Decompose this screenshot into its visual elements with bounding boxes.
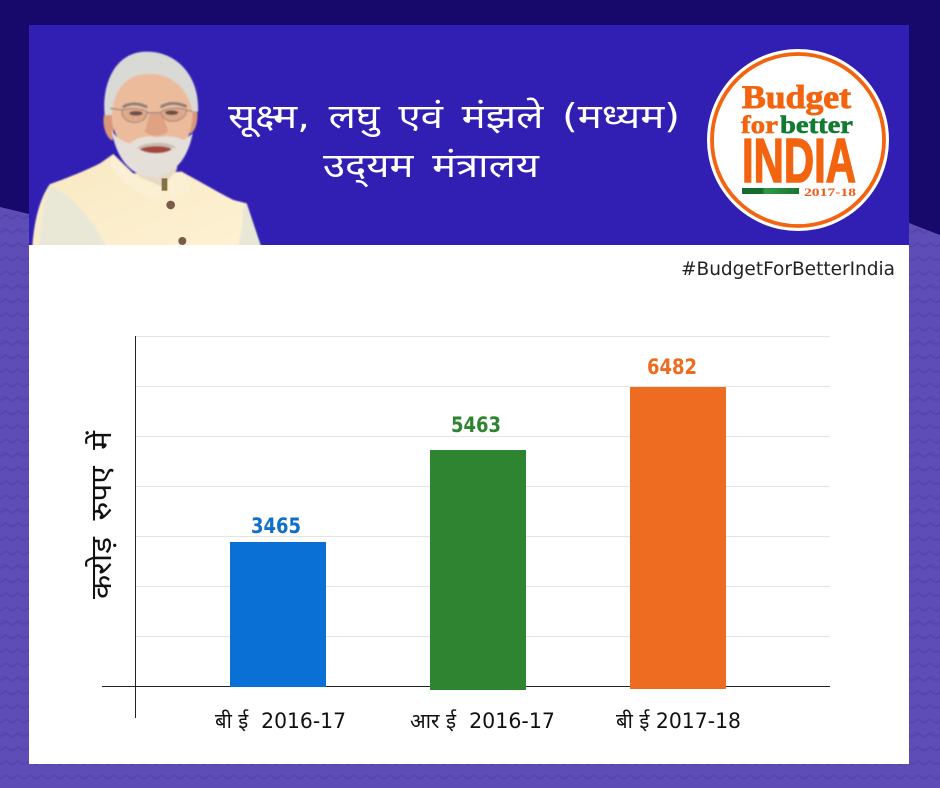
value: 6482: 6482 <box>647 355 697 379</box>
logo: Budget for better India: Budget <box>742 80 851 116</box>
header band <box>29 25 909 245</box>
title <box>228 97 680 188</box>
logo: Budget for better India: INDIA <box>742 127 856 196</box>
value: 5463: 5463 <box>451 413 501 437</box>
category label: BE 2016-17: बी ई 2016-17 <box>215 709 346 733</box>
eyebrows <box>123 103 187 107</box>
title: सूक्ष्म, लघु एवं मंझले (मध्यम) <box>228 97 680 137</box>
bar: BE 2017-18 <box>630 387 726 689</box>
left sleeve <box>39 185 107 248</box>
right sleeve <box>237 203 262 248</box>
category label: RE 2016-17: आर ई 2016-17 <box>410 709 555 733</box>
category label: BE 2017-18: बी ई 2017-18 <box>616 709 741 733</box>
hashtag: #BudgetForBetterIndia <box>681 258 895 280</box>
logo: Budget for better India <box>707 49 889 231</box>
beard <box>112 130 193 177</box>
buttons <box>166 201 175 209</box>
kurta collar <box>162 178 167 191</box>
bar: BE 2016-17 <box>230 542 326 687</box>
jacket <box>32 154 262 248</box>
portrait illustration <box>32 52 262 248</box>
bar: RE 2016-17 <box>430 450 526 690</box>
logo: Budget for better India: better <box>780 112 853 139</box>
hair <box>104 52 198 115</box>
logo: Budget for better India: for <box>741 112 778 139</box>
face <box>111 73 193 144</box>
y axis title: करोड़ रुपए में <box>84 430 118 599</box>
axes <box>102 336 830 718</box>
nose <box>145 113 168 136</box>
bar chart <box>84 336 830 733</box>
white chart panel <box>29 245 909 764</box>
title: उद्‌यम मंत्रालय <box>323 146 540 188</box>
value: 3465: 3465 <box>251 514 301 538</box>
glasses <box>110 108 193 113</box>
logo: Budget for better India: 2017-18 <box>804 185 856 199</box>
moustache and lips <box>137 143 177 148</box>
gridlines <box>135 336 830 636</box>
neck <box>120 147 180 187</box>
collar <box>109 154 162 200</box>
ears <box>103 115 115 141</box>
